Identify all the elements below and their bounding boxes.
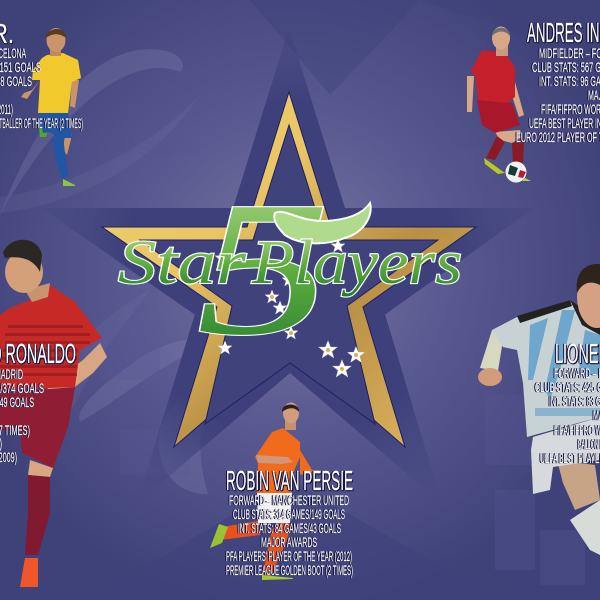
- city texture: [70, 140, 585, 585]
- text: PREMIER LEAGUE GOLDEN BOOT (2 TIMES): [226, 562, 353, 578]
- text: Neymar Jr.: [0, 18, 83, 131]
- text: ROBIN VAN PERSIE: [226, 465, 353, 496]
- background swooshes: [0, 49, 240, 494]
- text: PFA PLAYERS' PLAYER OF THE YEAR (2012): [226, 548, 352, 564]
- player: Iniesta: [467, 26, 531, 182]
- logo: 5 Star Players: Star: [118, 229, 247, 297]
- text: Robin van Persie: FORWARD – MANCHESTER UNITED: [229, 492, 349, 508]
- player: Ronaldo: [0, 240, 107, 587]
- text: CLUB STATS: 314 GAMES/149 GOALS: [233, 506, 345, 522]
- football: [506, 162, 526, 182]
- player: Neymar: [21, 28, 81, 186]
- text: Andres Iniesta: [516, 17, 600, 145]
- text: Robin van Persie: MAJOR AWARDS: [261, 534, 317, 550]
- gold star outline: [102, 92, 476, 447]
- text: Cristiano Ronaldo: [0, 338, 76, 465]
- logo: 5 Star Players: 5: [196, 162, 330, 375]
- text: Lionel Messi: [535, 338, 600, 466]
- text: Robin van Persie: [226, 465, 353, 578]
- player: Van Persie: [210, 402, 320, 580]
- logo: 5 Star Players: Players: [251, 229, 462, 297]
- small white stars: [215, 239, 364, 377]
- dark star backing: [102, 92, 475, 447]
- text: Robin van Persie: INT. STATS: 84 GAMES/43 GOALS: [238, 520, 341, 536]
- logo: 5 Star Players: [118, 162, 462, 375]
- player: Messi: [478, 264, 600, 555]
